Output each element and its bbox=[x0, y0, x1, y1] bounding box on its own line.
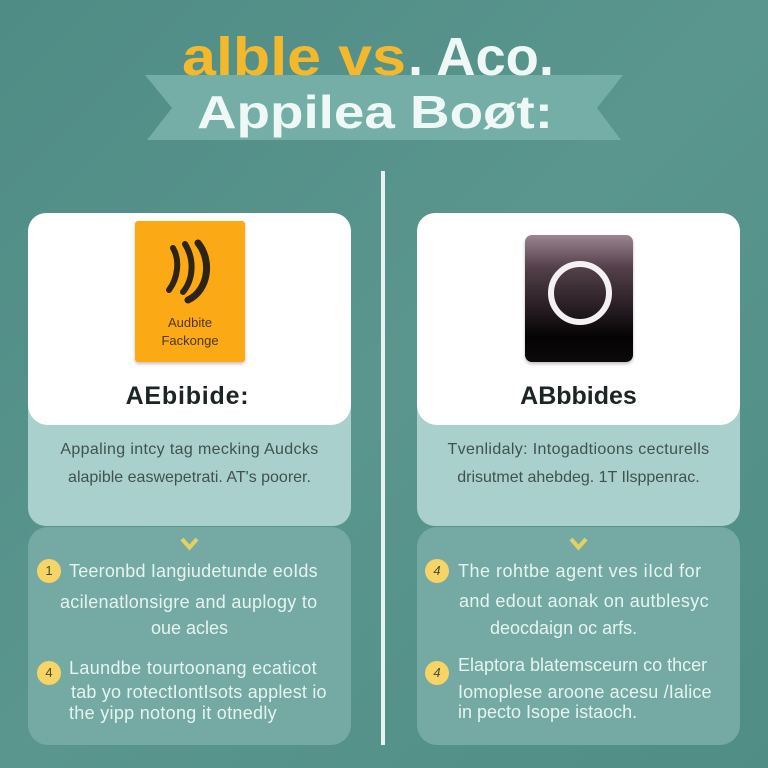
title line two: Appilea Boøt: bbox=[197, 86, 553, 138]
right card heading: ABbbides bbox=[520, 382, 637, 410]
number badge one: 1 bbox=[45, 563, 53, 578]
panel: left comparison bbox=[28, 213, 351, 745]
right white card bbox=[417, 213, 740, 425]
title ribbon bbox=[145, 75, 623, 140]
icon: sound waves bbox=[166, 240, 210, 304]
left description bbox=[60, 441, 319, 486]
book label: Fackonge bbox=[161, 332, 219, 348]
center divider bbox=[381, 171, 385, 745]
feature one line three: oue acles bbox=[151, 618, 228, 638]
icon: left chevron bbox=[180, 538, 198, 550]
left description: Appaling intcy tag mecking Audcks bbox=[60, 441, 319, 458]
left feature one bbox=[37, 559, 318, 638]
right features background bbox=[417, 527, 740, 745]
right feature two bbox=[425, 655, 712, 722]
panel: right comparison bbox=[417, 213, 740, 745]
right description background bbox=[417, 401, 740, 526]
right description: drisutmet ahebdeg. 1T Ilsppenrac. bbox=[457, 469, 700, 486]
title line one bbox=[182, 27, 554, 87]
left card heading: AEbibide: bbox=[126, 382, 249, 410]
feature one line one: Teeronbd Iangiudetunde eoIds bbox=[69, 561, 318, 581]
feature two line three: the yipp notong it otnedly bbox=[69, 703, 277, 723]
title line one: alble vs bbox=[182, 27, 406, 87]
right feature one bbox=[425, 559, 709, 638]
left feature two bbox=[37, 658, 327, 723]
icon: Apple Books dark square bbox=[525, 235, 633, 362]
icon: right chevron bbox=[570, 538, 588, 550]
left description: alapible easwepetrati. AT's poorer. bbox=[68, 469, 311, 486]
feature two line two: tab yo rotectIontIsots applest io bbox=[71, 682, 327, 702]
number badge three bbox=[425, 559, 449, 583]
left description background bbox=[28, 401, 351, 526]
feature one line two: acilenatlonsigre and auplogy to bbox=[60, 592, 317, 612]
left features background bbox=[28, 527, 351, 745]
feature two line one: Laundbe tourtoonang ecaticot bbox=[69, 658, 317, 678]
number badge two bbox=[37, 661, 61, 685]
number badge four: 4 bbox=[433, 665, 441, 680]
book label: Audbite bbox=[168, 315, 212, 330]
book label bbox=[161, 315, 219, 348]
number badge four bbox=[425, 661, 449, 685]
feature four line three: in pecto Isope istaoch. bbox=[458, 702, 637, 722]
number badge three: 4 bbox=[433, 563, 441, 578]
feature three line one: The rohtbe agent ves iIcd for bbox=[458, 561, 702, 581]
feature three line three: deocdaign oc arfs. bbox=[490, 618, 637, 638]
icon: white ring bbox=[548, 261, 612, 325]
left white card bbox=[28, 213, 351, 425]
icon: Audible orange book bbox=[135, 221, 245, 362]
right description: Tvenlidaly: Intogadtioons cecturells bbox=[448, 441, 709, 458]
right description bbox=[448, 441, 709, 486]
feature three line two: and edout aonak on autblesyc bbox=[459, 591, 709, 611]
title line one: . Aco. bbox=[408, 27, 554, 87]
feature four line one: Elaptora blatemsceurn co thcer bbox=[458, 655, 707, 675]
number badge two: 4 bbox=[45, 665, 53, 680]
feature four line two: Iomoplese aroone acesu /Ialice bbox=[458, 682, 712, 702]
number badge one bbox=[37, 559, 61, 583]
